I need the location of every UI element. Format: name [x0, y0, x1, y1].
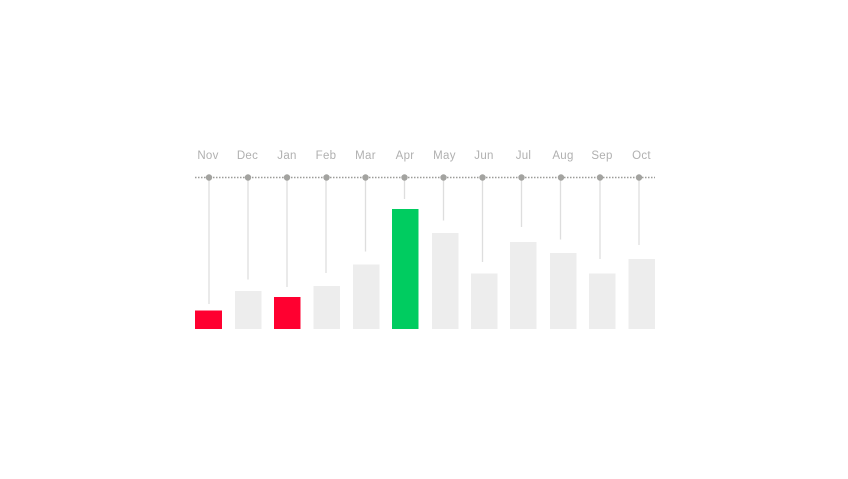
bars: [195, 209, 655, 329]
bar: Nov (low, red): [195, 310, 222, 329]
connector lines: [209, 178, 639, 304]
month labels: Dec: [237, 150, 258, 162]
bar: Jul: [510, 242, 536, 329]
month labels: Apr: [396, 150, 414, 162]
month labels: Sep: [591, 150, 613, 162]
bar: Dec: [235, 291, 262, 329]
month labels: Jan: [277, 150, 297, 162]
month labels: [197, 150, 651, 162]
bar: Sep: [589, 274, 616, 329]
bar: Jun: [471, 274, 498, 329]
month labels: Aug: [552, 150, 574, 162]
month labels: Oct: [632, 150, 651, 162]
bar: May: [432, 233, 458, 329]
month labels: Feb: [316, 150, 336, 162]
timeline dots: [206, 174, 642, 181]
month labels: Jul: [516, 150, 531, 162]
dotted timeline: [195, 176, 655, 178]
bar: Aug: [550, 253, 576, 329]
month labels: Jun: [474, 150, 494, 162]
bar: Feb: [314, 286, 340, 329]
bar: Oct: [628, 259, 655, 329]
month labels: Mar: [355, 150, 376, 162]
bar: Apr (peak, green): [392, 209, 418, 329]
month labels: May: [433, 150, 456, 162]
bar: Jan (low, red): [274, 297, 300, 329]
month labels: Nov: [197, 150, 219, 162]
bar: Mar: [353, 264, 380, 329]
